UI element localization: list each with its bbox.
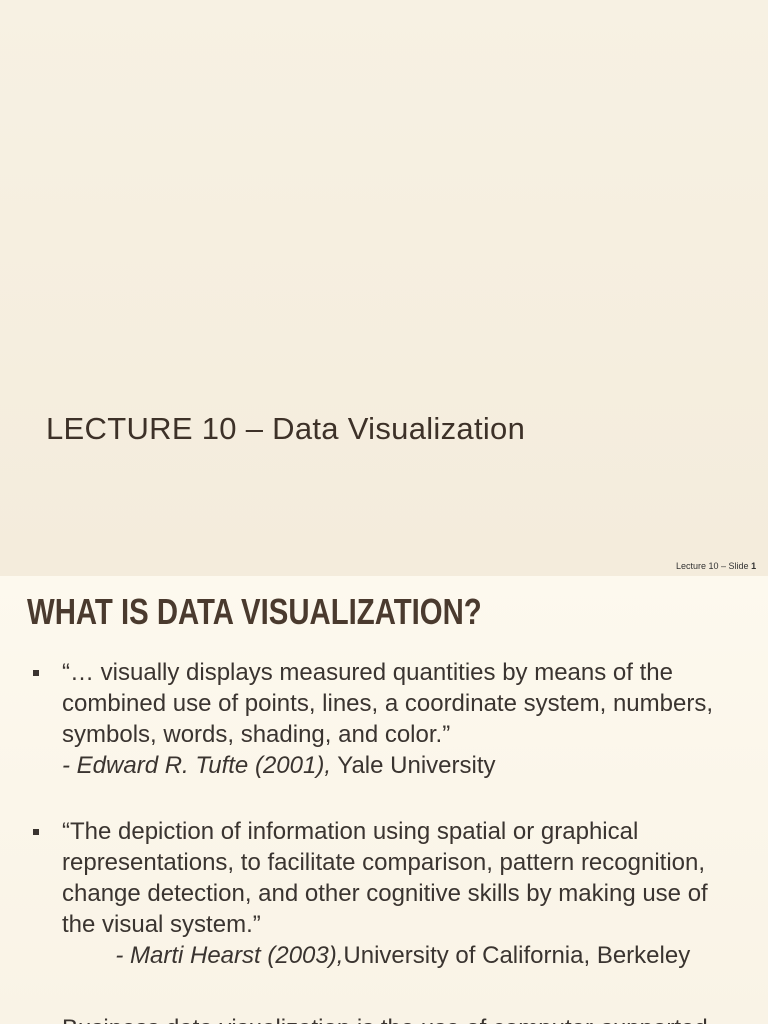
bullet: Tufte quote: symbols, words, shading, and color.” [62,721,450,748]
bullet: Hearst quote: “The depiction of information using spatial or graphical [62,818,638,845]
bullet: Hearst quote [33,818,708,969]
heading: WHAT IS DATA VISUALIZATION? [27,591,482,632]
bullet: Hearst quote: the visual system.” [62,911,261,938]
slide footer: Lecture 10 – Slide 1 [676,561,756,571]
bullet: Hearst quote: - Marti Hearst (2003),University of California, Berkeley [115,942,690,969]
bullet: Tufte quote: “… visually displays measured quantities by means of the [62,659,673,686]
panel: title slide [0,0,768,576]
panel: slide 2 [0,576,768,1024]
title: LECTURE 10 – Data Visualization [46,411,525,446]
bullet: Hearst quote: representations, to facilitate comparison, pattern recognition, [62,849,705,876]
bullet: Hearst quote: change detection, and other cognitive skills by making use of [62,880,708,907]
bullet: Tufte quote [33,659,713,779]
bullet: Tufte quote: combined use of points, lines, a coordinate system, numbers, [62,690,713,717]
bullet: Tufte quote: - Edward R. Tufte (2001), Yale University [62,752,496,779]
